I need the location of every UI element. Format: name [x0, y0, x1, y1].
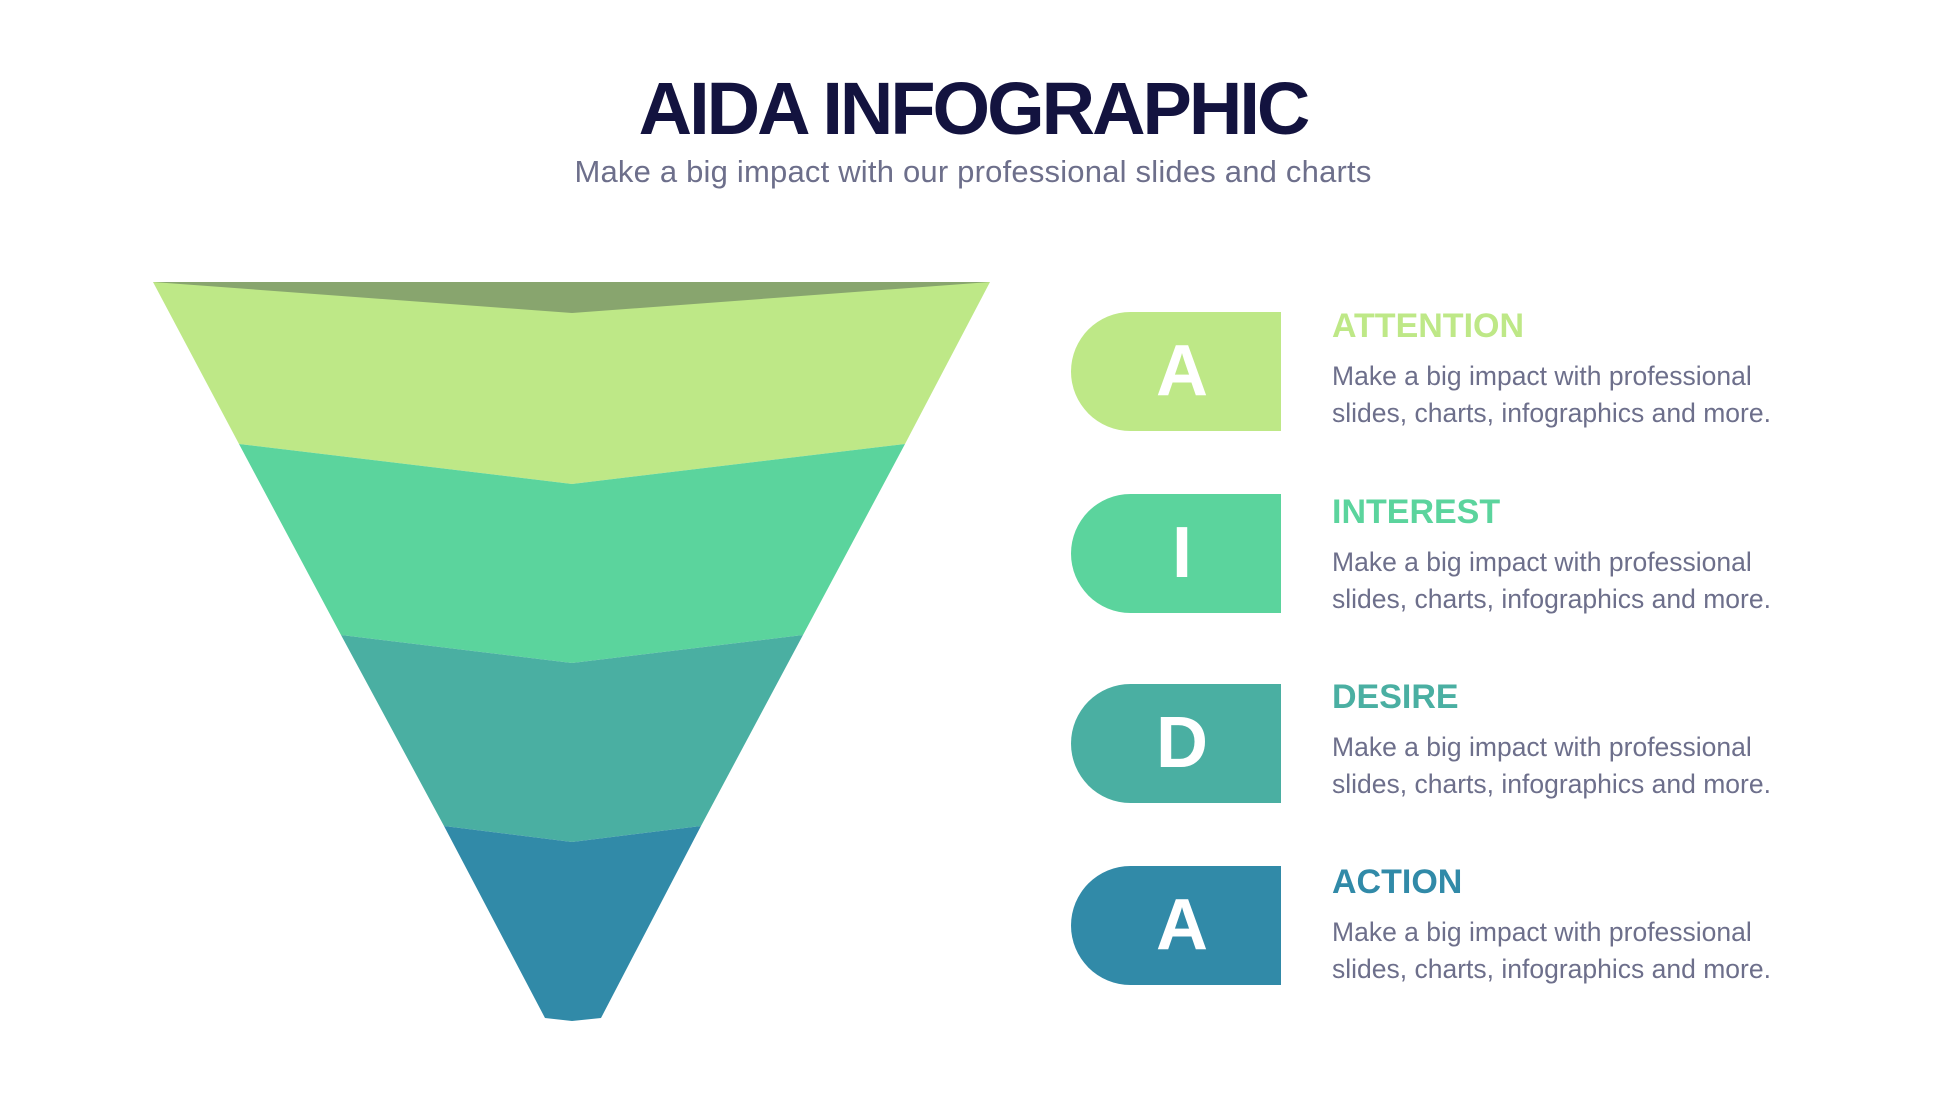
text: attention: ATTENTION	[1332, 307, 1524, 345]
text: action	[1332, 863, 1771, 984]
text: attention	[1332, 307, 1771, 428]
text: interest	[1332, 493, 1771, 614]
funnel layer: attention	[153, 282, 990, 484]
text: interest: Make a big impact with professional	[1332, 547, 1752, 577]
text: action: Make a big impact with professional	[1332, 917, 1752, 947]
badge: D desire: D	[1156, 703, 1208, 783]
funnel layer: action	[444, 826, 701, 1021]
text: interest: slides, charts, infographics and more.	[1332, 584, 1771, 614]
text: interest: INTEREST	[1332, 493, 1500, 531]
text: desire	[1332, 678, 1771, 799]
badge: A action	[1071, 866, 1281, 985]
badge: D desire	[1071, 684, 1281, 803]
text: attention: Make a big impact with professional	[1332, 361, 1752, 391]
badge: A attention: A	[1156, 331, 1208, 411]
text: action: slides, charts, infographics and more.	[1332, 954, 1771, 984]
text: desire: DESIRE	[1332, 678, 1459, 716]
badge: A action: A	[1156, 885, 1208, 965]
title: AIDA INFOGRAPHIC	[639, 67, 1307, 150]
badge: I interest	[1071, 494, 1281, 613]
text: desire: Make a big impact with professional	[1332, 732, 1752, 762]
funnel layer: desire	[341, 635, 803, 842]
text: desire: slides, charts, infographics and more.	[1332, 769, 1771, 799]
subtitle: Make a big impact with our professional slides and charts	[574, 154, 1372, 189]
badge: I interest: I	[1172, 513, 1192, 593]
funnel layer: interest	[239, 444, 905, 663]
badge: A attention	[1071, 312, 1281, 431]
text: attention: slides, charts, infographics and more.	[1332, 398, 1771, 428]
text: action: ACTION	[1332, 863, 1462, 901]
